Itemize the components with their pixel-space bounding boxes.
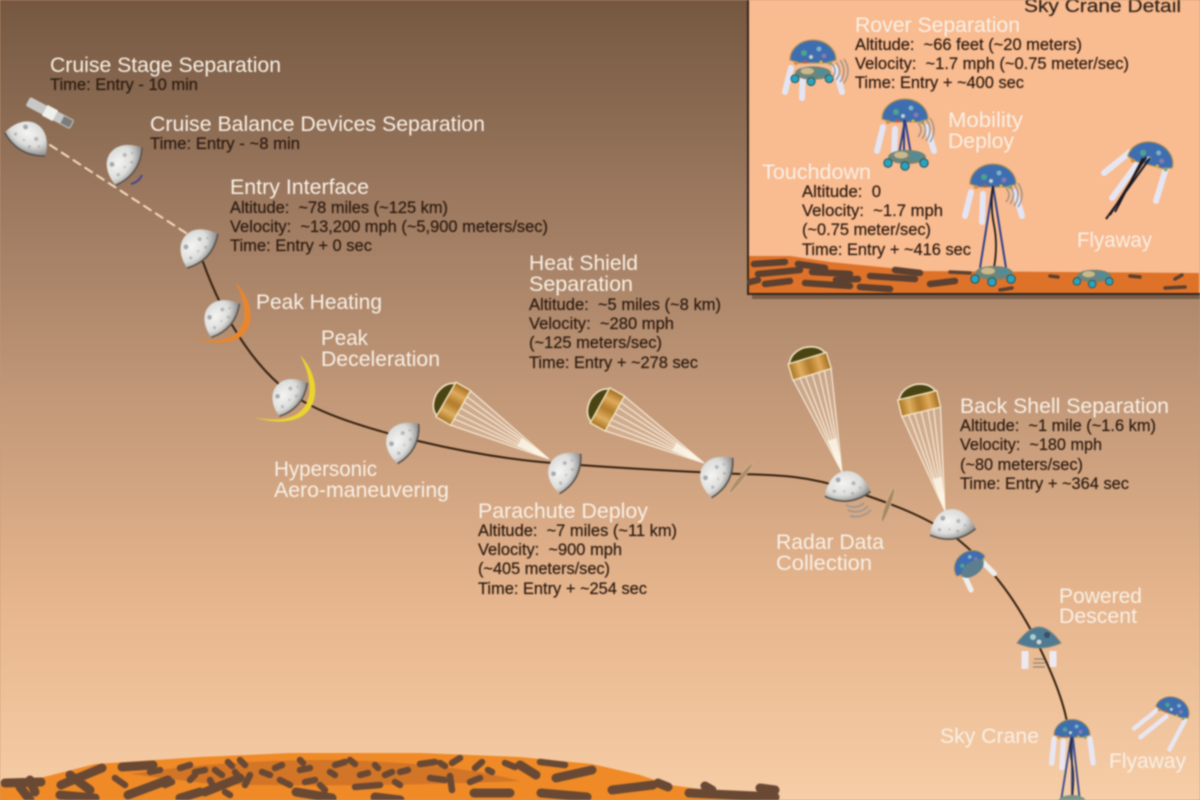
label: rover separation: Rover Separation — [855, 14, 1020, 37]
capsule 3: entry interface — [170, 219, 223, 273]
label: mobility deploy: Mobility — [948, 109, 1024, 132]
label: entry interface: Entry Interface — [230, 176, 369, 199]
label: peak deceleration: Deceleration — [321, 348, 440, 371]
label: hypersonic aero-maneuvering: Hypersonic — [274, 458, 377, 481]
capsule 5: peak deceleration — [263, 369, 313, 421]
label: peak deceleration — [321, 327, 440, 371]
label: back shell separation: Velocity: ~180 mph — [960, 436, 1102, 454]
label: rover separation: Velocity: ~1.7 mph (~0.75 meter/sec) — [855, 55, 1129, 73]
label: heat shield separation: Separation — [529, 273, 633, 296]
label: hypersonic aero-maneuvering: Aero-maneuvering — [274, 479, 449, 502]
capsule 1: cruise stage separation — [1, 112, 57, 162]
descent stage after separation — [948, 544, 996, 592]
capsule 7: parachute deploy — [540, 443, 587, 497]
label: peak deceleration: Peak — [321, 327, 368, 350]
label: rover separation: Time: Entry + ~400 sec — [855, 74, 1024, 92]
parachute 1 — [426, 377, 559, 476]
label: cruise stage separation: Time: Entry - 10 min — [50, 76, 198, 94]
heat shield 2 — [879, 487, 897, 523]
inset ground — [749, 256, 1199, 293]
rover separation stage — [785, 40, 848, 98]
label: parachute deploy: Altitude: ~7 miles (~11 km) — [478, 522, 677, 540]
landed rover — [1073, 270, 1113, 288]
label: mobility deploy — [948, 109, 1024, 153]
label: radar data collection: Radar Data — [776, 531, 884, 554]
heat shield 1 — [727, 461, 755, 495]
label: parachute deploy — [478, 500, 677, 598]
label: heat shield separation: Time: Entry + ~278 sec — [529, 354, 698, 372]
label: entry interface: Altitude: ~78 miles (~125 km) — [230, 199, 448, 217]
label: radar data collection — [776, 531, 884, 575]
label: touchdown: (~0.75 meter/sec) — [802, 221, 931, 239]
label: touchdown: Time: Entry + ~416 sec — [802, 241, 971, 259]
powered descent stage — [1017, 627, 1061, 669]
label: parachute deploy: Velocity: ~900 mph — [478, 541, 622, 559]
label: cruise stage separation: Cruise Stage Separation — [50, 54, 281, 77]
sky crane stage — [1052, 719, 1093, 800]
label: hypersonic aero-maneuvering — [274, 458, 449, 502]
balance device fragment — [131, 175, 142, 184]
Mars surface — [0, 753, 780, 800]
parachute 2 — [581, 382, 714, 480]
label: touchdown: Velocity: ~1.7 mph — [802, 202, 943, 220]
label: powered descent: Descent — [1059, 605, 1137, 628]
capsule 10: back shell separation — [927, 506, 977, 542]
label: parachute deploy: (~405 meters/sec) — [478, 560, 610, 578]
label: cruise balance devices separation — [150, 113, 485, 153]
capsule 6: hypersonic aero-maneuvering — [378, 413, 425, 467]
label: radar data collection: Collection — [776, 552, 872, 575]
label: entry interface: Velocity: ~13,200 mph (~5,900 meters/sec) — [230, 218, 548, 236]
label: flyaway: Flyaway — [1109, 750, 1186, 773]
heating arc: peak heating — [193, 282, 251, 343]
dashed coast line — [50, 145, 186, 233]
label: touchdown: Touchdown — [762, 161, 871, 184]
label: touchdown: Altitude: 0 — [802, 183, 881, 201]
label: powered descent: Powered — [1059, 585, 1142, 608]
label: flyaway: Flyaway — [1077, 229, 1152, 252]
label: parachute deploy: Time: Entry + ~254 sec — [478, 580, 647, 598]
label: back shell separation: Altitude: ~1 mile (~1.6 km) — [960, 417, 1156, 435]
label: heat shield separation: Velocity: ~280 mph — [529, 315, 674, 333]
capsule 9: radar data collection — [822, 469, 871, 503]
label: heat shield separation: (~125 meters/sec) — [529, 334, 662, 352]
label: entry interface — [230, 176, 548, 255]
capsule 2: balance devices — [97, 134, 148, 189]
flyaway stage — [1104, 137, 1177, 219]
label: rover separation: Altitude: ~66 feet (~20 meters) — [855, 36, 1082, 54]
deceleration arc: peak deceleration — [253, 355, 315, 422]
label: parachute deploy: Parachute Deploy — [478, 500, 649, 523]
trajectory — [50, 145, 1067, 722]
label: entry interface: Time: Entry + 0 sec — [230, 237, 372, 255]
label: cruise balance devices separation: Time: Entry - ~8 min — [150, 135, 300, 153]
label: rover separation — [855, 14, 1129, 92]
flyaway stage — [1131, 688, 1193, 752]
label: peak heating: Peak Heating — [256, 291, 382, 314]
capsule 8: heat shield separation — [692, 447, 739, 501]
label: back shell separation: (~80 meters/sec) — [960, 456, 1083, 474]
label: heat shield separation: Altitude: ~5 miles (~8 km) — [529, 296, 721, 314]
label: powered descent — [1059, 585, 1142, 628]
label: sky crane: Sky Crane — [940, 725, 1039, 748]
label: back shell separation — [960, 395, 1169, 493]
label: back shell separation: Time: Entry + ~364 sec — [960, 475, 1129, 493]
parachute 4 — [895, 380, 964, 516]
label: cruise stage separation — [50, 54, 281, 94]
label: back shell separation: Back Shell Separation — [960, 395, 1169, 418]
touchdown stage — [965, 164, 1022, 286]
label: cruise balance devices separation: Cruise Balance Devices Separation — [150, 113, 485, 136]
label: heat shield separation: Heat Shield — [529, 252, 638, 275]
radar waves — [846, 503, 871, 517]
mobility deploy stage — [877, 99, 934, 170]
cruise stage — [25, 96, 75, 130]
label: touchdown — [762, 161, 971, 259]
panel: sky crane detail — [748, 0, 1200, 299]
label: heat shield separation — [529, 252, 721, 372]
parachute 3 — [785, 342, 861, 478]
capsule 4: peak heating — [195, 290, 245, 342]
label: mobility deploy: Deploy — [948, 130, 1014, 153]
